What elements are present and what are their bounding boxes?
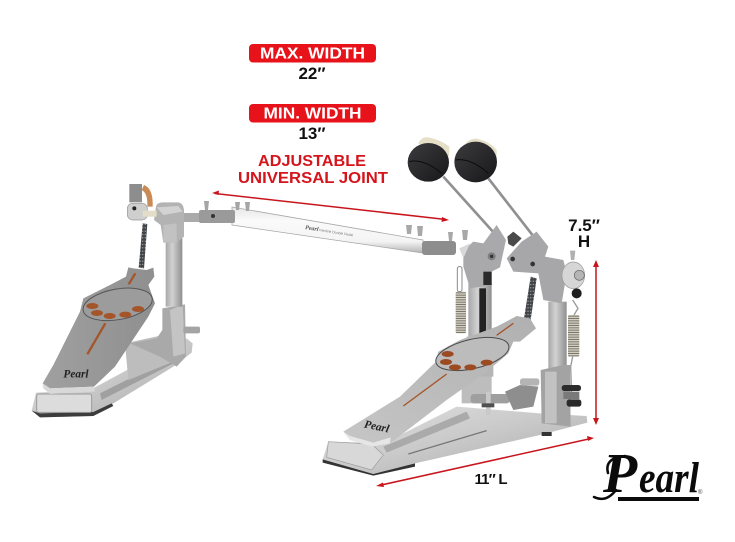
- outer spring: [568, 300, 579, 397]
- length label: 11″ L: [474, 471, 508, 488]
- right base plate: [323, 375, 587, 476]
- height label: [568, 216, 600, 251]
- center adjustable shaft: [184, 201, 468, 255]
- right post and hub assembly: [408, 137, 585, 427]
- height label: 7.5″: [568, 216, 600, 235]
- arrow: length: [376, 436, 594, 487]
- footboard circle: [433, 331, 512, 377]
- left pedal post: [130, 202, 200, 367]
- Pearl logo: ®: [698, 489, 703, 496]
- pedal linkage: [462, 375, 539, 415]
- max width label: 22″: [298, 64, 326, 83]
- outer hub: [507, 232, 585, 303]
- left footboard: [43, 267, 155, 394]
- right beater: [454, 139, 497, 182]
- arrow: height: [593, 260, 599, 425]
- height label: H: [578, 232, 590, 251]
- right footboard: Pearl: [363, 419, 391, 436]
- inner post: [467, 283, 493, 377]
- shaft logo: Pearl: [305, 225, 319, 233]
- adjustable universal joint heading: ADJUSTABLE: [258, 153, 366, 170]
- footboard dots: [440, 351, 493, 370]
- left pedal unit: [32, 184, 200, 417]
- min width label: [249, 104, 376, 143]
- right footboard: [343, 316, 536, 447]
- Pearl logo: P: [602, 443, 638, 505]
- left base plate: [32, 335, 193, 417]
- right universal joint: [406, 225, 468, 255]
- center adjustable shaft: Interlink Double Pedal: [319, 228, 354, 237]
- Pearl logo: [594, 443, 703, 505]
- adjustable universal joint heading: UNIVERSAL JOINT: [238, 170, 388, 187]
- max width label: [249, 44, 376, 83]
- left beater: [408, 137, 449, 182]
- min width label: MIN. WIDTH: [264, 106, 362, 122]
- min width label: 13″: [298, 124, 326, 143]
- chain: [524, 277, 537, 320]
- left footboard: Pearl: [63, 368, 89, 380]
- outer post: [541, 302, 571, 427]
- max width label: MAX. WIDTH: [260, 46, 365, 62]
- left beater rod: [443, 177, 493, 231]
- Pearl logo: earl: [639, 455, 699, 502]
- hoop clamp damper: [562, 385, 581, 407]
- inner spring: [456, 267, 466, 333]
- inner hub: [459, 225, 506, 288]
- right pedal unit: [323, 375, 587, 476]
- arrow: shaft width: [212, 190, 449, 222]
- adjustable universal joint heading: [238, 153, 388, 187]
- left beater hub and chain: [127, 184, 157, 268]
- right beater rod: [488, 178, 533, 235]
- left universal joint: [184, 201, 250, 223]
